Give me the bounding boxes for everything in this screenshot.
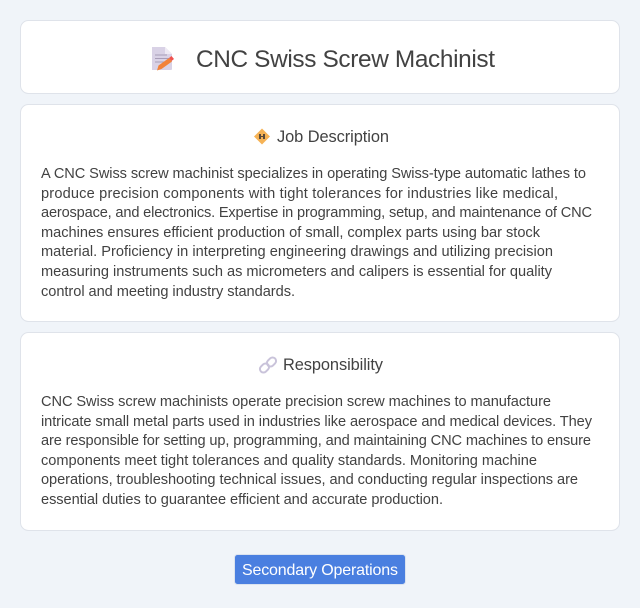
heading: responsibility: Responsibility bbox=[283, 356, 384, 374]
heading: job description: Job Description bbox=[277, 128, 389, 146]
text: responsibility body: essential duties to guarantee efficient and accurate production. bbox=[41, 492, 443, 508]
text: job description body: aerospace, and electronics. Expertise in programming, setup, and maintenance of CNC bbox=[41, 205, 592, 221]
icon: document with pencil bbox=[152, 47, 174, 70]
panel: job description bbox=[20, 104, 620, 322]
text: responsibility body: operations, troubleshooting technical issues, and conducting regular inspections are bbox=[41, 472, 578, 488]
text: responsibility body: intricate small metal parts used in industries like aerospace and medical devices. They bbox=[41, 414, 593, 430]
text: job description body: A CNC Swiss screw machinist specializes in operating Swiss-type automatic lathes to bbox=[41, 166, 586, 182]
text: job description body: produce precision components with tight tolerances for industries like medical, bbox=[41, 186, 558, 202]
text: job description body: material. Proficiency in interpreting engineering drawings and utilizing precision bbox=[41, 244, 553, 260]
text: responsibility body: CNC Swiss screw machinists operate precision screw machines to manufacture bbox=[41, 394, 551, 410]
panel: responsibility bbox=[20, 332, 620, 530]
icon: chain link bbox=[258, 356, 278, 374]
text: job description body: machines ensures efficient production of small, complex parts using bar stock bbox=[41, 225, 541, 241]
title text: CNC Swiss Screw Machinist bbox=[196, 46, 495, 73]
text: job description body bbox=[41, 166, 592, 300]
icon: warning diamond bbox=[254, 128, 270, 144]
button: secondary operations: Secondary Operations bbox=[242, 562, 398, 579]
text: responsibility body: are responsible for setting up, programming, and maintaining CNC machines to ensure bbox=[41, 433, 591, 449]
text: job description body: control and meeting industry standards. bbox=[41, 284, 295, 300]
button: secondary operations bbox=[234, 554, 406, 584]
text: responsibility body: components meet tight tolerances and quality standards. Monitoring machine bbox=[41, 453, 537, 469]
text: responsibility body bbox=[41, 394, 593, 508]
panel: title bbox=[20, 20, 620, 94]
text: job description body: measuring instruments such as micrometers and calipers is essential for quality bbox=[41, 264, 553, 280]
